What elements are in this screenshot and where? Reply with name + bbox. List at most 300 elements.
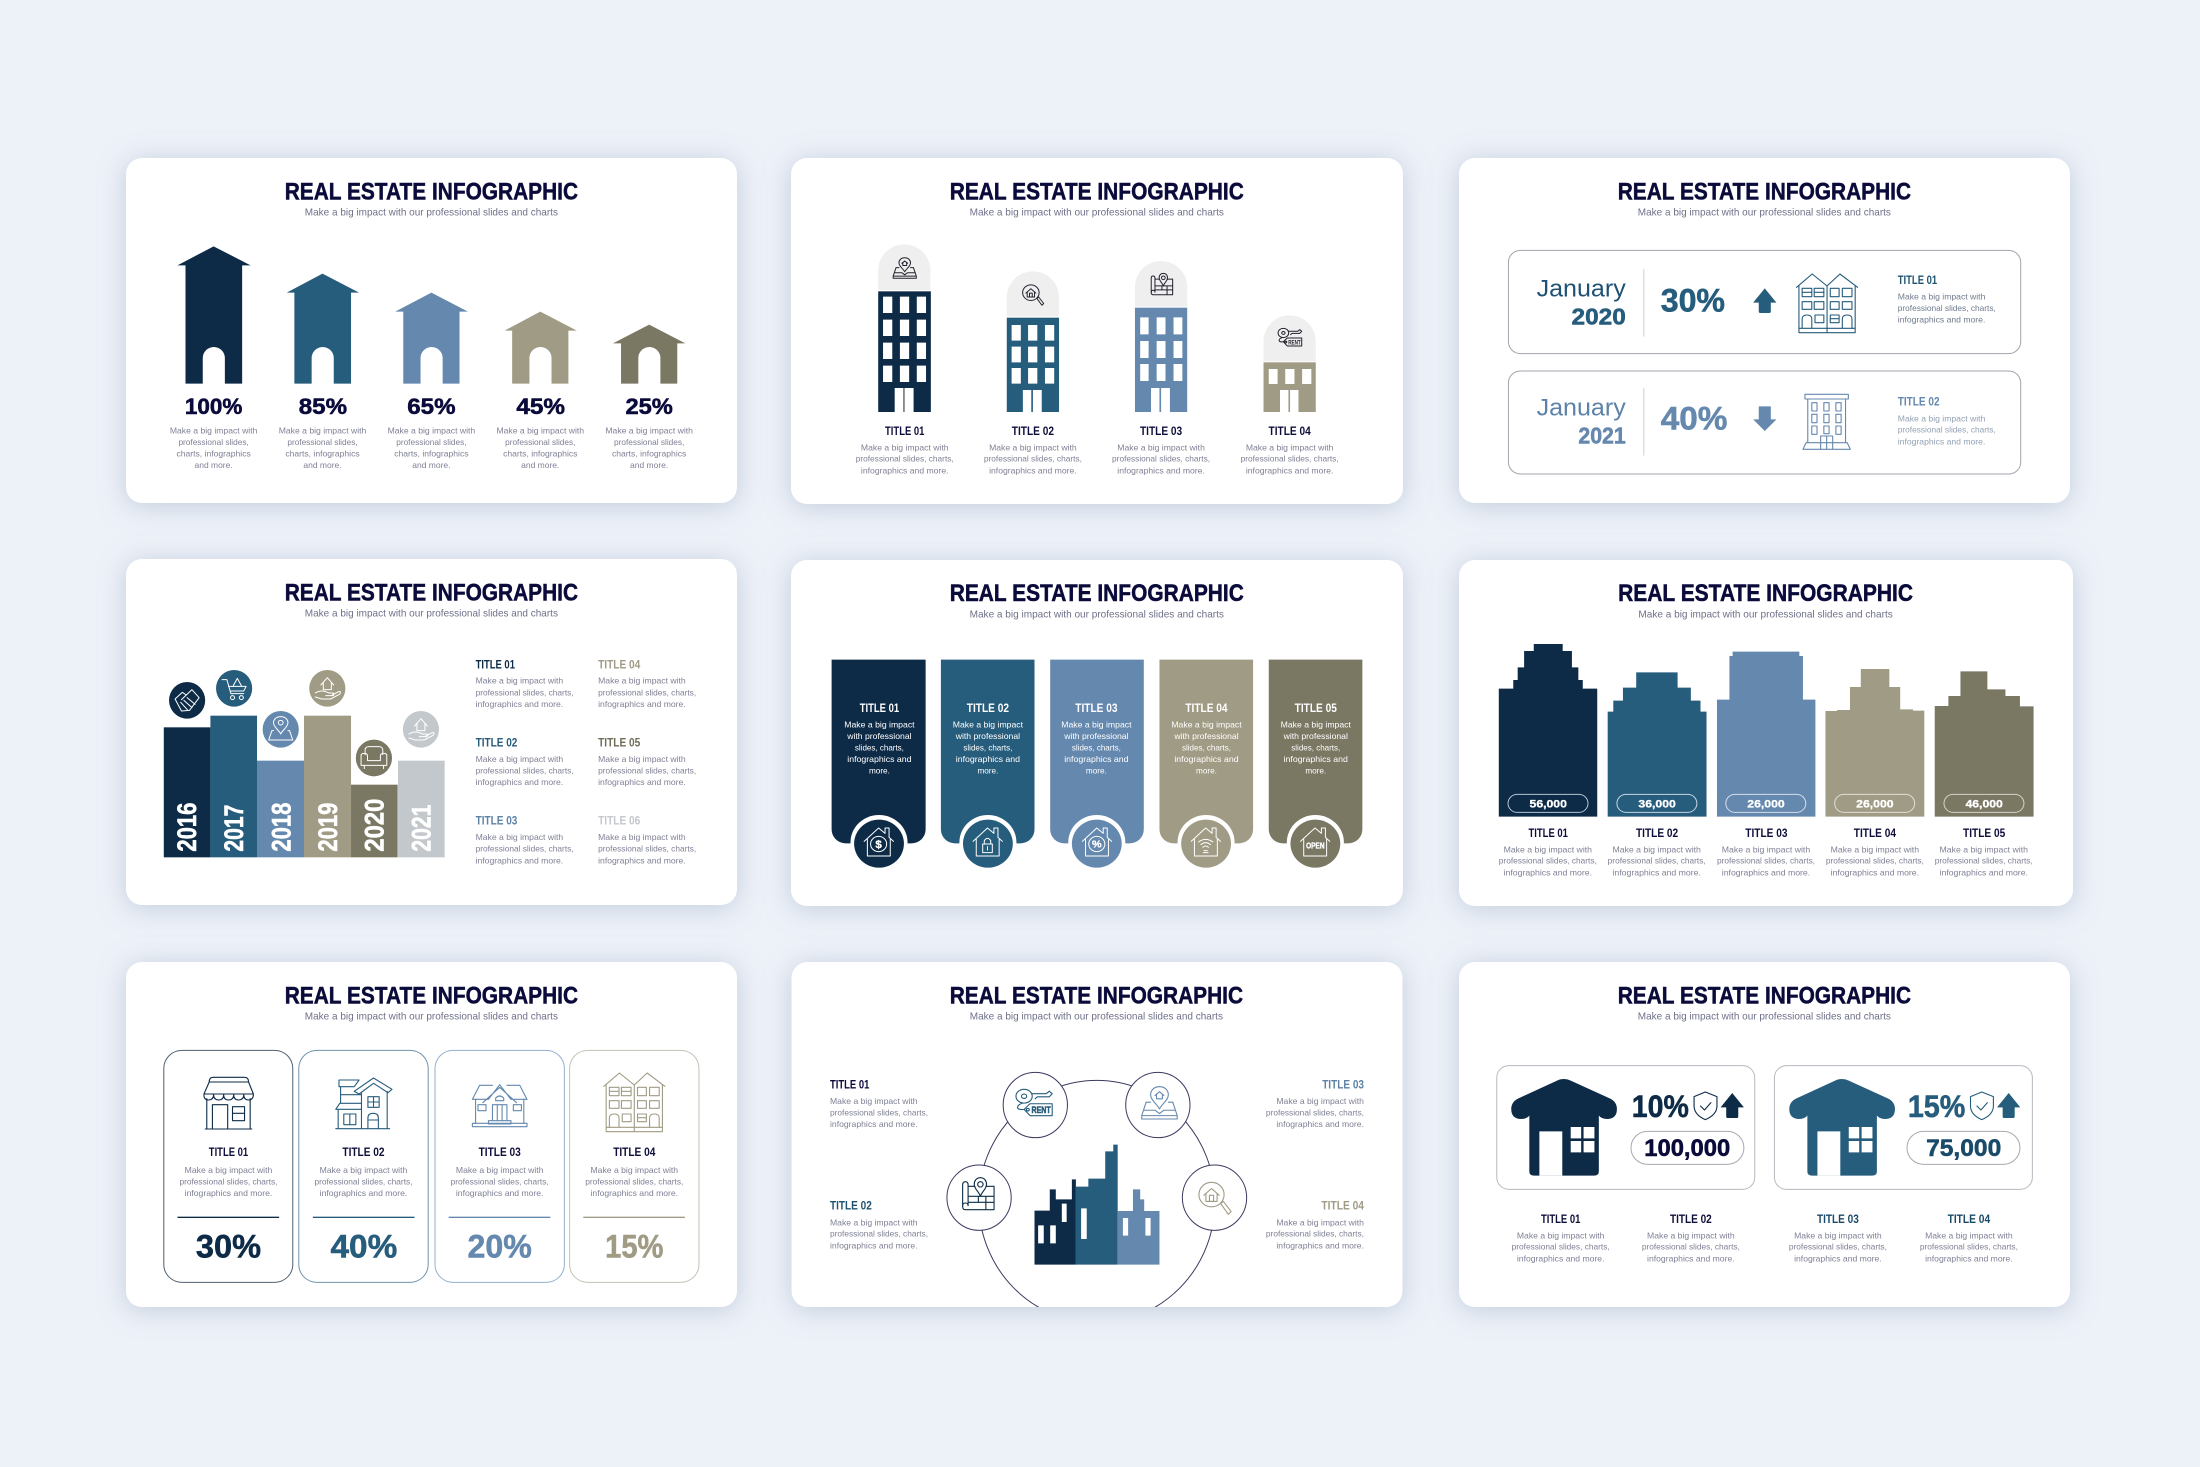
description 4: and more. bbox=[521, 461, 559, 471]
text: infographics and bbox=[847, 755, 912, 765]
description 5: charts, infographics bbox=[612, 449, 687, 459]
text: TITLE 03 bbox=[1075, 701, 1117, 715]
text: slides, charts, bbox=[1072, 743, 1121, 753]
text: more. bbox=[1086, 766, 1107, 776]
text block 01: TITLE 01 bbox=[830, 1077, 869, 1091]
text block 01 bbox=[830, 1077, 928, 1130]
icon: cart bbox=[216, 670, 252, 707]
text block: Make a big impact with bbox=[1898, 414, 1985, 424]
text: Make a big impact bbox=[1171, 720, 1242, 730]
card 4 bbox=[570, 1050, 699, 1282]
text block 02: professional slides, charts, bbox=[1642, 1242, 1740, 1252]
icon: hand and house light bbox=[403, 711, 439, 748]
panel: January comparison bbox=[1459, 158, 2070, 503]
icon: house percent bbox=[1082, 828, 1112, 856]
bar 2021 bbox=[398, 761, 445, 857]
arrow up bbox=[1753, 288, 1776, 313]
text block 02: professional slides, charts, bbox=[830, 1229, 928, 1239]
description 2: and more. bbox=[303, 461, 342, 471]
text block 06: TITLE 06 bbox=[598, 813, 640, 827]
house bar 45% bbox=[505, 312, 577, 384]
description 3: charts, infographics bbox=[394, 449, 469, 459]
text block 03: Make a big impact with bbox=[476, 833, 563, 843]
captions: TITLE 01 bbox=[1529, 826, 1568, 840]
text: infographics and bbox=[1064, 755, 1129, 765]
text: infographics and bbox=[1174, 755, 1239, 765]
text block 02 bbox=[830, 1199, 928, 1251]
text block 03: professional slides, charts, bbox=[476, 844, 574, 854]
text block 01: Make a big impact with bbox=[830, 1097, 918, 1107]
text block 04 bbox=[1920, 1212, 2018, 1264]
subtitle: Make a big impact with our professional slides and charts bbox=[1638, 610, 1893, 620]
text block 05 bbox=[598, 735, 696, 788]
icon: hand and house bbox=[309, 670, 345, 707]
captions: TITLE 05 bbox=[1963, 826, 2005, 840]
text: infographics and more. bbox=[456, 1189, 543, 1199]
icon: shop bbox=[204, 1077, 253, 1129]
description 2: Make a big impact with bbox=[279, 426, 366, 436]
description 3 bbox=[388, 426, 475, 471]
description 4 bbox=[496, 426, 584, 471]
text: slides, charts, bbox=[1291, 743, 1340, 753]
icon: house open bbox=[1300, 828, 1330, 856]
icon: house search bbox=[1023, 285, 1044, 305]
text block 03: professional slides, charts, bbox=[1789, 1242, 1887, 1252]
tower 4 bbox=[1264, 315, 1316, 412]
value 30%: 30% bbox=[1661, 282, 1725, 319]
text: with professional bbox=[1173, 732, 1239, 742]
house bar 100% bbox=[177, 246, 251, 384]
text block 05: Make a big impact with bbox=[598, 755, 686, 765]
text block 01: Make a big impact with bbox=[1517, 1231, 1604, 1241]
icon: shield check bbox=[1970, 1092, 1993, 1120]
text: slides, charts, bbox=[855, 743, 904, 753]
captions: infographics and more. bbox=[1940, 868, 2028, 878]
text block 02 bbox=[476, 735, 574, 788]
value pill bbox=[1907, 1131, 2020, 1164]
captions bbox=[1499, 826, 2033, 878]
description 1: Make a big impact with bbox=[170, 426, 257, 436]
tower captions: TITLE 02 bbox=[1012, 424, 1054, 438]
node: map pin bbox=[1126, 1072, 1190, 1138]
text block: professional slides, charts, bbox=[1898, 304, 1996, 314]
text block 02: infographics and more. bbox=[476, 778, 563, 788]
text block 01: professional slides, charts, bbox=[830, 1108, 928, 1118]
text block 01: professional slides, charts, bbox=[1512, 1242, 1610, 1252]
date: 2021 bbox=[1578, 423, 1626, 449]
text block 03: professional slides, charts, bbox=[1266, 1108, 1364, 1118]
icon: twin buildings bbox=[604, 1073, 665, 1132]
text block 02: professional slides, charts, bbox=[476, 766, 574, 776]
card 15% bbox=[1774, 1066, 2032, 1189]
captions: professional slides, charts, bbox=[1826, 856, 1924, 866]
column 4 bbox=[1159, 660, 1253, 870]
icon: rent key: RENT bbox=[1288, 340, 1301, 346]
large ring bbox=[979, 1080, 1215, 1323]
title: REAL ESTATE INFOGRAPHIC bbox=[1618, 579, 1913, 606]
building 2 bbox=[1608, 672, 1707, 817]
text: infographics and more. bbox=[185, 1189, 272, 1199]
icon: map pin bbox=[893, 258, 916, 278]
text bbox=[179, 1145, 278, 1199]
text block 03: Make a big impact with bbox=[1276, 1097, 1364, 1107]
description 1: professional slides, bbox=[178, 438, 249, 448]
building 3: 26,000 bbox=[1747, 797, 1785, 810]
description 2: charts, infographics bbox=[285, 449, 360, 459]
text bbox=[1281, 701, 1351, 776]
text: with professional bbox=[1063, 732, 1129, 742]
tower captions: TITLE 04 bbox=[1269, 424, 1311, 438]
building 1 bbox=[1499, 644, 1597, 817]
title: REAL ESTATE INFOGRAPHIC bbox=[285, 982, 578, 1009]
title: REAL ESTATE INFOGRAPHIC bbox=[285, 579, 578, 606]
icon: house bbox=[336, 1078, 392, 1129]
value 40%: 40% bbox=[331, 1228, 397, 1265]
text: more. bbox=[869, 766, 890, 776]
bar 2017: 2017 bbox=[219, 805, 249, 852]
date: January bbox=[1537, 394, 1626, 421]
description 1 bbox=[170, 426, 257, 471]
text block 04 bbox=[598, 657, 696, 710]
icon: rent key bbox=[1278, 328, 1302, 346]
text: TITLE 02 bbox=[967, 701, 1009, 715]
value 10%: 10% bbox=[1632, 1090, 1689, 1124]
bar 2021: 2021 bbox=[407, 805, 437, 852]
icon: floor plan bbox=[1151, 273, 1173, 295]
text bbox=[1061, 701, 1132, 776]
building 4 bbox=[1825, 669, 1924, 817]
tower captions: professional slides, charts, bbox=[1112, 454, 1210, 464]
text: slides, charts, bbox=[1182, 743, 1231, 753]
text: professional slides, charts, bbox=[585, 1177, 683, 1187]
bar 2017 bbox=[210, 716, 257, 857]
text: TITLE 02 bbox=[342, 1145, 385, 1159]
text block 06: Make a big impact with bbox=[598, 833, 686, 843]
title: REAL ESTATE INFOGRAPHIC bbox=[1618, 178, 1911, 205]
description 3: and more. bbox=[412, 461, 450, 471]
value 25%: 25% bbox=[625, 395, 673, 419]
icon: shield check bbox=[1694, 1092, 1717, 1120]
text block 04: TITLE 04 bbox=[598, 657, 641, 671]
value 65%: 65% bbox=[407, 395, 456, 419]
text: Make a big impact with bbox=[320, 1166, 407, 1176]
tower captions: professional slides, charts, bbox=[1241, 454, 1339, 464]
text: with professional bbox=[846, 732, 912, 742]
arrow up bbox=[1721, 1093, 1744, 1118]
text block: TITLE 02 bbox=[1898, 395, 1940, 408]
tower captions: TITLE 03 bbox=[1140, 424, 1182, 438]
description 5: professional slides, bbox=[614, 438, 684, 448]
text block 02: TITLE 02 bbox=[476, 735, 517, 749]
bar 2018 bbox=[257, 761, 304, 857]
text block 03: Make a big impact with bbox=[1794, 1231, 1882, 1241]
text block 04: infographics and more. bbox=[1925, 1254, 2013, 1264]
column 3 bbox=[1050, 660, 1144, 870]
text block 01: Make a big impact with bbox=[476, 676, 563, 686]
subtitle: Make a big impact with our professional slides and charts bbox=[305, 1012, 558, 1022]
icon: house percent: % bbox=[1092, 840, 1102, 850]
tower captions: infographics and more. bbox=[861, 466, 949, 476]
text block 02: infographics and more. bbox=[830, 1241, 918, 1251]
text block 01: TITLE 01 bbox=[476, 657, 515, 671]
text block 03: TITLE 03 bbox=[1322, 1077, 1364, 1091]
text: with professional bbox=[1283, 732, 1348, 742]
text block 01: infographics and more. bbox=[476, 700, 563, 710]
captions: professional slides, charts, bbox=[1499, 856, 1597, 866]
icon: armchair bbox=[356, 740, 392, 776]
text block 04: Make a big impact with bbox=[1276, 1218, 1364, 1228]
date bbox=[1537, 394, 1626, 449]
text block: infographics and more. bbox=[1898, 315, 1985, 325]
text: TITLE 05 bbox=[1295, 701, 1337, 715]
text bbox=[1171, 701, 1242, 776]
text block 06 bbox=[598, 813, 696, 866]
value 15%: 15% bbox=[605, 1228, 663, 1265]
captions: professional slides, charts, bbox=[1717, 856, 1815, 866]
subtitle: Make a big impact with our professional slides and charts bbox=[305, 208, 558, 218]
text bbox=[585, 1145, 683, 1199]
captions: Make a big impact with bbox=[1504, 845, 1592, 855]
value 15%: 15% bbox=[1908, 1090, 1965, 1124]
value 20%: 20% bbox=[468, 1228, 532, 1265]
icon: twin buildings bbox=[1797, 274, 1858, 333]
building 1: 56,000 bbox=[1530, 797, 1567, 810]
text: TITLE 04 bbox=[1185, 701, 1228, 715]
text block 04: Make a big impact with bbox=[1925, 1231, 2013, 1241]
text block 02: infographics and more. bbox=[1647, 1254, 1735, 1264]
tower captions: infographics and more. bbox=[1117, 466, 1205, 476]
node: rent key: RENT bbox=[1031, 1106, 1051, 1116]
panel: tower buildings with icons bbox=[791, 158, 1403, 504]
text block 04: infographics and more. bbox=[598, 700, 686, 710]
captions: infographics and more. bbox=[1831, 868, 1919, 878]
card: January 2020 bbox=[1508, 250, 2021, 354]
subtitle: Make a big impact with our professional slides and charts bbox=[1638, 1012, 1891, 1022]
house bar 25% bbox=[613, 325, 685, 384]
text: more. bbox=[1196, 766, 1217, 776]
text block 04: TITLE 04 bbox=[1948, 1212, 1991, 1226]
tower 3 bbox=[1135, 261, 1187, 412]
subtitle: Make a big impact with our professional slides and charts bbox=[970, 1012, 1223, 1022]
text block 03: infographics and more. bbox=[1794, 1254, 1882, 1264]
text block 06: infographics and more. bbox=[598, 856, 686, 866]
text block: professional slides, charts, bbox=[1898, 425, 1996, 435]
text block 04: infographics and more. bbox=[1276, 1241, 1364, 1251]
icon: house open: OPEN bbox=[1306, 841, 1325, 850]
building 5 bbox=[1935, 671, 2034, 817]
text bbox=[844, 701, 915, 776]
text block 03: infographics and more. bbox=[476, 856, 563, 866]
tower captions: Make a big impact with bbox=[1246, 443, 1333, 453]
captions: Make a big impact with bbox=[1940, 845, 2028, 855]
text: professional slides, charts, bbox=[314, 1177, 413, 1187]
text block 02 bbox=[1642, 1212, 1740, 1264]
text: Make a big impact bbox=[1281, 720, 1351, 730]
house bar 65% bbox=[395, 293, 468, 384]
text block 05: infographics and more. bbox=[598, 778, 686, 788]
text block: infographics and more. bbox=[1898, 437, 1985, 447]
text block 03: infographics and more. bbox=[1276, 1120, 1364, 1130]
tower 2 bbox=[1007, 271, 1059, 412]
text block 06: professional slides, charts, bbox=[598, 844, 696, 854]
captions: TITLE 02 bbox=[1636, 826, 1678, 840]
text block 01: infographics and more. bbox=[830, 1120, 918, 1130]
text block bbox=[1898, 395, 1996, 447]
description 5: and more. bbox=[630, 461, 668, 471]
text block: TITLE 01 bbox=[1898, 273, 1937, 287]
text block 01 bbox=[1512, 1212, 1610, 1264]
description 3: professional slides, bbox=[396, 438, 467, 448]
value 30%: 30% bbox=[196, 1228, 261, 1265]
building 5: 46,000 bbox=[1965, 798, 2003, 810]
building 3 bbox=[1717, 652, 1815, 817]
subtitle: Make a big impact with our professional slides and charts bbox=[1638, 208, 1891, 218]
value 45%: 45% bbox=[516, 395, 565, 419]
value 40%: 40% bbox=[1661, 400, 1727, 437]
text: Make a big impact bbox=[844, 720, 915, 730]
title: REAL ESTATE INFOGRAPHIC bbox=[950, 178, 1244, 205]
text bbox=[451, 1145, 549, 1199]
text block 04: professional slides, charts, bbox=[1920, 1242, 2018, 1252]
arrow down bbox=[1753, 406, 1776, 431]
house bar 85% bbox=[287, 274, 359, 384]
text bbox=[314, 1145, 413, 1199]
tower captions: Make a big impact with bbox=[861, 443, 949, 453]
description 4: Make a big impact with bbox=[496, 426, 584, 436]
text block 04: TITLE 04 bbox=[1321, 1199, 1365, 1212]
description 5: Make a big impact with bbox=[605, 426, 693, 436]
house icon bbox=[1511, 1079, 1617, 1176]
title: REAL ESTATE INFOGRAPHIC bbox=[285, 178, 578, 205]
text: TITLE 04 bbox=[613, 1145, 656, 1159]
text block 02: TITLE 02 bbox=[830, 1199, 872, 1212]
text: Make a big impact with bbox=[456, 1166, 543, 1176]
title: REAL ESTATE INFOGRAPHIC bbox=[950, 579, 1244, 606]
captions: TITLE 03 bbox=[1745, 826, 1787, 840]
text block 03: TITLE 03 bbox=[476, 813, 517, 827]
text block 03: TITLE 03 bbox=[1817, 1212, 1859, 1226]
captions: infographics and more. bbox=[1613, 868, 1701, 878]
text: infographics and bbox=[1284, 755, 1348, 765]
text block 01: professional slides, charts, bbox=[476, 688, 574, 698]
value pill: 75,000 bbox=[1926, 1134, 2001, 1161]
text: Make a big impact with bbox=[590, 1166, 678, 1176]
description 4: charts, infographics bbox=[503, 449, 578, 459]
text block 03 bbox=[1789, 1212, 1887, 1264]
tower captions: Make a big impact with bbox=[989, 443, 1077, 453]
captions: TITLE 04 bbox=[1854, 826, 1897, 840]
text block: Make a big impact with bbox=[1898, 292, 1985, 302]
bar 2020 bbox=[351, 785, 398, 857]
text: TITLE 03 bbox=[479, 1145, 521, 1159]
node: rent key bbox=[1003, 1072, 1067, 1138]
node: house search bbox=[1182, 1165, 1247, 1230]
icon: house lock bbox=[973, 828, 1002, 856]
text block 02: TITLE 02 bbox=[1670, 1212, 1712, 1226]
description 1: charts, infographics bbox=[176, 449, 251, 459]
value 100%: 100% bbox=[185, 395, 243, 419]
text block 04: professional slides, charts, bbox=[598, 688, 696, 698]
icon: location bbox=[263, 711, 299, 748]
date: January bbox=[1537, 275, 1626, 302]
text: professional slides, charts, bbox=[451, 1177, 549, 1187]
column 2 bbox=[941, 660, 1035, 870]
text: infographics and more. bbox=[320, 1189, 407, 1199]
text block 01: TITLE 01 bbox=[1541, 1212, 1580, 1226]
value pill bbox=[1631, 1131, 1744, 1164]
icon: mansion bbox=[472, 1085, 527, 1127]
bar 2020: 2020 bbox=[360, 799, 390, 852]
tower captions: Make a big impact with bbox=[1117, 443, 1205, 453]
text block 02: Make a big impact with bbox=[1647, 1231, 1735, 1241]
description 3: Make a big impact with bbox=[388, 426, 475, 436]
captions: infographics and more. bbox=[1722, 868, 1810, 878]
text block bbox=[1898, 273, 1996, 325]
title: REAL ESTATE INFOGRAPHIC bbox=[1618, 982, 1911, 1009]
title: REAL ESTATE INFOGRAPHIC bbox=[950, 982, 1243, 1009]
text block 04: professional slides, charts, bbox=[1266, 1229, 1364, 1239]
description 4: professional slides, bbox=[505, 438, 575, 448]
bar 2016 bbox=[164, 727, 210, 857]
text: Make a big impact with bbox=[185, 1166, 272, 1176]
text: TITLE 01 bbox=[860, 701, 899, 715]
value pill: 100,000 bbox=[1644, 1134, 1730, 1161]
date bbox=[1537, 275, 1626, 330]
bar 2018: 2018 bbox=[266, 803, 296, 852]
text: infographics and more. bbox=[590, 1189, 678, 1199]
icon: apartment block bbox=[1803, 394, 1850, 449]
tower captions: professional slides, charts, bbox=[984, 454, 1082, 464]
icon: house wifi bbox=[1191, 828, 1221, 856]
text: Make a big impact bbox=[1061, 720, 1132, 730]
text block 05: professional slides, charts, bbox=[598, 766, 696, 776]
tower captions: infographics and more. bbox=[989, 466, 1077, 476]
text block 02: Make a big impact with bbox=[476, 755, 563, 765]
central skyline bbox=[1035, 1145, 1159, 1265]
text block 02: Make a big impact with bbox=[830, 1218, 918, 1228]
captions: professional slides, charts, bbox=[1935, 856, 2033, 866]
card 3 bbox=[435, 1050, 564, 1282]
tower 1 bbox=[878, 244, 931, 412]
text: infographics and bbox=[956, 755, 1020, 765]
text: with professional bbox=[955, 732, 1020, 742]
panel: percentage house bars bbox=[126, 158, 737, 503]
date: 2020 bbox=[1572, 304, 1626, 330]
panel: circular diagram with skyline bbox=[792, 962, 1402, 1323]
text block 03 bbox=[1266, 1077, 1364, 1130]
description 1: and more. bbox=[195, 461, 233, 471]
panel: column tabs with house badges bbox=[791, 560, 1403, 906]
description 5 bbox=[605, 426, 693, 471]
captions: professional slides, charts, bbox=[1608, 856, 1706, 866]
card: January 2021 bbox=[1508, 371, 2021, 474]
captions: Make a big impact with bbox=[1613, 845, 1701, 855]
card 10% bbox=[1497, 1066, 1755, 1189]
subtitle: Make a big impact with our professional slides and charts bbox=[970, 208, 1224, 218]
text: TITLE 01 bbox=[209, 1145, 248, 1159]
tower captions: TITLE 01 bbox=[885, 424, 924, 438]
text block 04: Make a big impact with bbox=[598, 676, 686, 686]
house icon bbox=[1789, 1079, 1895, 1176]
bar 2016: 2016 bbox=[172, 803, 202, 852]
text: professional slides, charts, bbox=[179, 1177, 278, 1187]
text block 04 bbox=[1266, 1199, 1365, 1251]
icon: house dollar: $ bbox=[875, 838, 882, 851]
panel: yearly bars bbox=[126, 559, 737, 905]
panel: outlined property cards bbox=[126, 962, 737, 1307]
card 2 bbox=[299, 1050, 428, 1282]
text: more. bbox=[1305, 766, 1326, 776]
